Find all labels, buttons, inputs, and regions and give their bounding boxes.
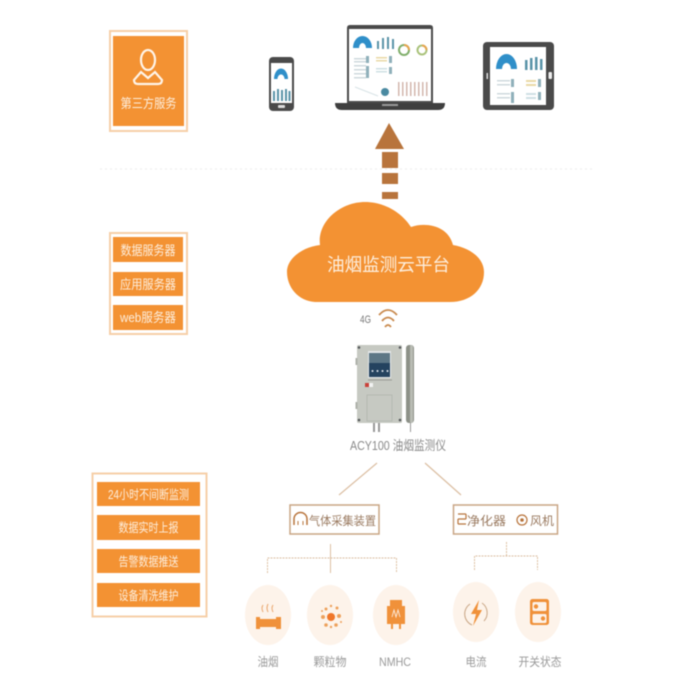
tree connector: gas sensors	[268, 544, 396, 573]
arrow: upload to devices	[375, 123, 404, 199]
box: gas collection device: 气体采集装置	[309, 513, 376, 528]
cloud: monitoring platform	[287, 202, 484, 302]
box: gas collection device	[290, 505, 379, 534]
item: switch status: 开关状态	[518, 655, 562, 669]
box: purifier and fan: 风机	[530, 514, 554, 528]
row: application server: 应用服务器	[120, 277, 176, 292]
item: NMHC	[373, 585, 419, 669]
panel: monitoring features	[92, 474, 206, 616]
item: particulates	[307, 585, 353, 669]
row: realtime reporting: 数据实时上报	[118, 520, 179, 535]
box: purifier and fan	[454, 505, 558, 534]
icon: smartphone	[269, 57, 294, 111]
icon: person	[134, 50, 162, 84]
tree connector: power sensors	[474, 542, 538, 570]
item: current	[453, 582, 499, 669]
row: cleaning maintenance: 设备清洗维护	[118, 588, 178, 603]
row: realtime reporting	[97, 515, 200, 540]
cloud: monitoring platform: 油烟监测云平台	[327, 255, 450, 275]
panel: third-party service	[110, 31, 187, 131]
label: 4G: 4G	[360, 314, 371, 326]
item: oil fume: 油烟	[258, 655, 278, 669]
row: continuous monitoring: 24小时不间断监测	[108, 487, 189, 502]
box: purifier and fan: 净化器	[467, 514, 506, 528]
row: alarm push: 告警数据推送	[118, 554, 179, 569]
item: oil fume	[245, 585, 291, 669]
label: third-party service: 第三方服务	[120, 96, 176, 111]
row: alarm push	[97, 549, 200, 573]
icon: wifi signal	[379, 310, 397, 327]
connector lines	[339, 463, 461, 495]
row: continuous monitoring	[97, 482, 200, 506]
row: data server: 数据服务器	[120, 243, 176, 258]
caption: device name: ACY100 油烟监测仪	[350, 438, 446, 453]
device: ACY100 monitor	[356, 345, 414, 432]
panel: servers	[110, 233, 187, 334]
item: particulates: 颗粒物	[314, 654, 346, 669]
row: web server: web服务器	[119, 310, 176, 325]
item: switch status	[515, 582, 562, 669]
item: current: 电流	[466, 655, 486, 669]
icon: tablet dashboard	[483, 42, 554, 110]
row: cleaning maintenance	[97, 583, 200, 607]
item: NMHC: NMHC	[379, 655, 411, 669]
icon: laptop dashboard	[335, 25, 445, 110]
